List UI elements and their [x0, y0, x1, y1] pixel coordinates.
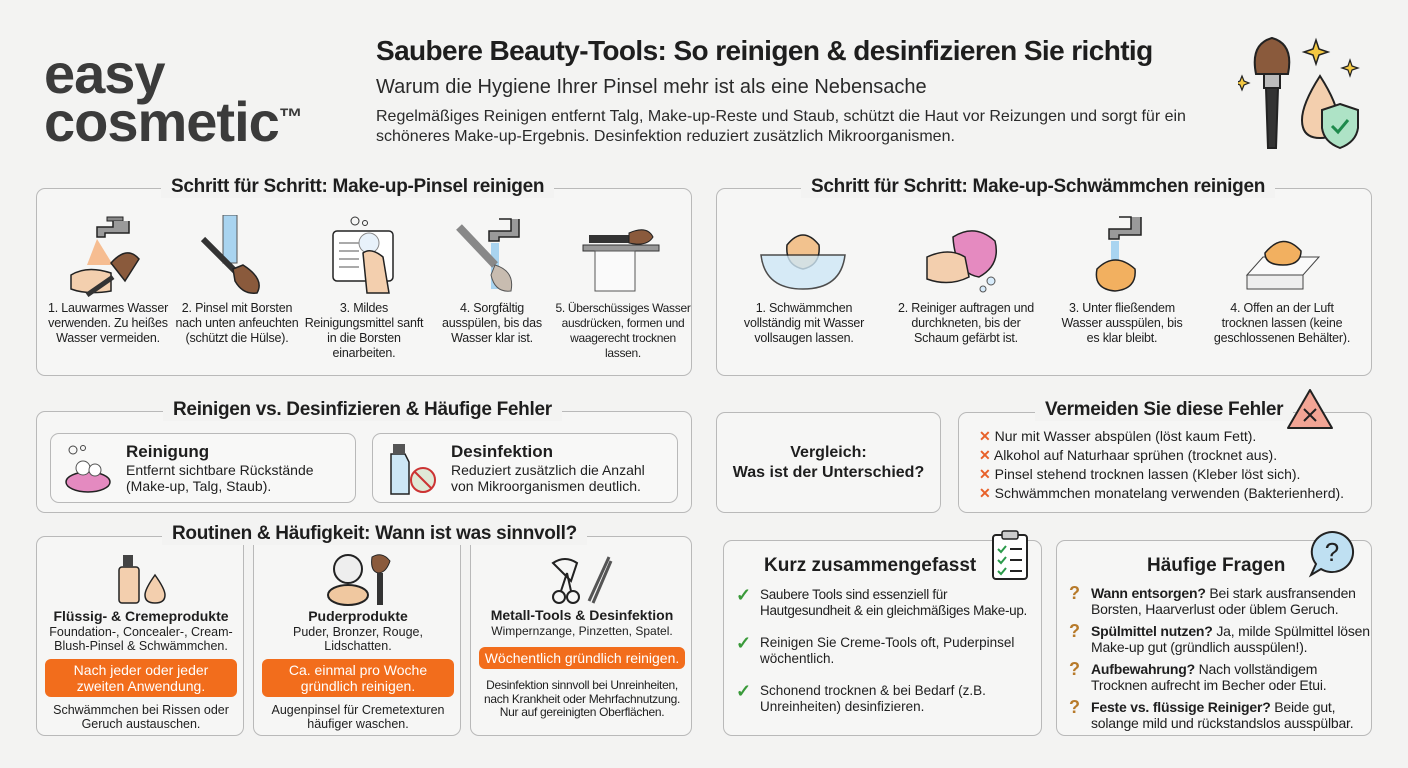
icon: soap — [65, 445, 111, 493]
icon: checklist — [992, 530, 1028, 580]
panel: sponge cleaning steps — [716, 188, 1372, 376]
card: metal tools: Metall-Tools & Desinfektion — [491, 607, 673, 623]
panel: FAQ — [1056, 540, 1372, 736]
step 5: 5. Überschüssiges Wasser ausdrücken, formen und waagerecht trocknen lassen. — [555, 301, 691, 360]
card: metal tools — [470, 536, 692, 736]
card: Reinigung — [50, 433, 356, 503]
list: FAQ: ? — [1069, 697, 1080, 717]
card: liquid products: Nach jeder oder jeder zweiten Anwendung. — [74, 662, 208, 694]
icon: hand squeezing sponge — [926, 230, 998, 292]
list: summary points: Saubere Tools sind essenziell für Hautgesundheit & ein gleichmäßiges Make-up. — [760, 587, 1027, 618]
list: FAQ: ? — [1069, 583, 1080, 603]
card: powder products: Ca. einmal pro Woche gründlich reinigen. — [289, 662, 427, 694]
icon: foundation and sponge — [118, 555, 166, 604]
text: Reinigung: Entfernt sichtbare Rückstände — [126, 462, 314, 478]
list: FAQ: ? — [1069, 621, 1080, 641]
list: summary points: ✓ — [736, 585, 751, 605]
icon: sponge on towel — [1246, 240, 1320, 290]
icon: sponge under tap — [1096, 216, 1142, 292]
list: summary points: Reinigen Sie Creme-Tools oft, Puderpinsel wöchentlich. — [760, 635, 1014, 666]
box: comparison question — [716, 412, 941, 513]
list: summary points — [736, 585, 1027, 714]
title: Saubere Beauty-Tools: So reinigen & desinfizieren Sie richtig — [376, 35, 1153, 66]
list: FAQ: ? — [1069, 659, 1080, 679]
icon: question bubble: ? — [1325, 537, 1339, 567]
text: Reinigung: (Make-up, Talg, Staub). — [126, 478, 271, 494]
card: liquid products — [36, 536, 244, 736]
text: Desinfektion: Reduziert zusätzlich die Anzahl — [451, 462, 645, 478]
step 1: 1. Lauwarmes Wasser verwenden. Zu heißes Wasser vermeiden. — [48, 301, 168, 345]
icon: tap and hands — [70, 216, 140, 297]
list: summary points: ✓ — [736, 681, 751, 701]
card: powder products: Puder, Bronzer, Rouge, Lidschatten. Augenpinsel für Cremetexturen häufiger waschen. — [271, 625, 444, 731]
icon: sponge in bowl — [760, 234, 846, 290]
list: FAQ: Aufbewahrung? Nach vollständigem Trocknen aufrecht im Becher oder Etui. — [1091, 661, 1326, 693]
logo: cosmetic™ — [44, 90, 302, 153]
text: Desinfektion: von Mikroorganismen deutlich. — [451, 478, 641, 494]
step s3: 3. Unter fließendem Wasser ausspülen, bis es klar bleibt. — [1061, 301, 1183, 345]
card: powder products: Puderprodukte — [308, 608, 408, 624]
list: mistakes: ✕ Nur mit Wasser abspülen (löst kaum Fett). — [979, 428, 1256, 444]
icon: compact and brush — [327, 554, 390, 606]
panel: routines — [36, 523, 692, 736]
intro text: Regelmäßiges Reinigen entfernt Talg, Make-up-Reste und Staub, schützt die Haut vor Reizungen und sorgt für ein schöneres Make-up-Ergebnis. Desinfektion reduziert zusätzlich Mikroorganismen. — [376, 108, 1186, 145]
icon: soap and hand — [332, 216, 394, 294]
box: comparison question: Was ist der Unterschied? — [733, 464, 924, 481]
icon: spray bottle — [390, 444, 436, 495]
heading: pinsel steps: Schritt für Schritt: Make-up-Pinsel reinigen — [171, 176, 544, 197]
heading: routines: Routinen & Häufigkeit: Wann ist was sinnvoll? — [172, 523, 577, 544]
icon: rinse brush — [456, 218, 520, 292]
heading: vs: Reinigen vs. Desinfizieren & Häufige Fehler — [173, 399, 552, 420]
list: summary points: ✓ — [736, 633, 751, 653]
icon: warning triangle — [1287, 389, 1333, 429]
card: powder products — [253, 536, 461, 736]
box: comparison question: Vergleich: — [790, 444, 867, 461]
panel: cleaning vs disinfection — [36, 411, 692, 513]
step s2: 2. Reiniger auftragen und durchkneten, bis der Schaum gefärbt ist. — [898, 301, 1034, 345]
step 3: 3. Mildes Reinigungsmittel sanft in die Borsten einarbeiten. — [305, 301, 423, 360]
logo — [44, 42, 302, 153]
list: mistakes — [979, 428, 1344, 501]
card: liquid products: Flüssig- & Cremeprodukte — [53, 608, 229, 624]
panel: summary — [723, 540, 1042, 736]
list: FAQ: Spülmittel nutzen? Ja, milde Spülmittel lösen Make-up gut (gründlich ausspülen!). — [1091, 623, 1370, 655]
list: mistakes: ✕ Alkohol auf Naturhaar sprühen (trocknet aus). — [979, 447, 1277, 463]
step 4: 4. Sorgfältig ausspülen, bis das Wasser klar ist. — [442, 301, 542, 345]
panel: mistakes — [958, 412, 1372, 513]
icon: question bubble — [1308, 531, 1354, 578]
list: FAQ — [1069, 583, 1370, 731]
card: metal tools: Wimpernzange, Pinzetten, Spatel. Desinfektion sinnvoll bei Unreinheiten, nach Krankheit oder Mehrfachnutzung. Nur auf gereinigten Oberflächen. — [484, 624, 680, 719]
heading: FAQ: Häufige Fragen — [1147, 555, 1285, 576]
logo: easy — [44, 42, 165, 105]
text: Desinfektion: Desinfektion — [451, 442, 553, 461]
card: Desinfektion — [372, 433, 678, 503]
list: mistakes: ✕ Schwämmchen monatelang verwenden (Bakterienherd). — [979, 485, 1344, 501]
step 2: 2. Pinsel mit Borsten nach unten anfeuchten (schützt die Hülse). — [176, 301, 298, 345]
icon: brush, sponge, shield — [1238, 37, 1360, 150]
step s1: 1. Schwämmchen vollständig mit Wasser vollsaugen lassen. — [744, 301, 864, 345]
icon: curler and tweezers — [552, 556, 612, 604]
icon: brush under water — [200, 215, 260, 294]
heading: summary: Kurz zusammengefasst — [764, 555, 976, 576]
heading: mistakes: Vermeiden Sie diese Fehler — [1045, 399, 1283, 420]
card: metal tools: Wöchentlich gründlich reinigen. — [485, 650, 679, 666]
text: Reinigung — [126, 442, 314, 494]
icon: brush drying on towel — [582, 229, 660, 292]
list: summary points: Schonend trocknen & bei Bedarf (z.B. Unreinheiten) desinfizieren. — [760, 683, 986, 714]
text: Reinigung: Reinigung — [126, 442, 209, 461]
heading: sponge steps: Schritt für Schritt: Make-up-Schwämmchen reinigen — [811, 176, 1265, 197]
text: Desinfektion — [451, 442, 645, 494]
step s4: 4. Offen an der Luft trocknen lassen (keine geschlossenen Behälter). — [1214, 301, 1350, 345]
card: liquid products: Foundation-, Concealer-, Cream-Blush-Pinsel & Schwämmchen. Schwämmchen bei Rissen oder Geruch austauschen. — [49, 625, 233, 731]
list: FAQ: Feste vs. flüssige Reiniger? Beide gut, solange mild und rückstandslos ausspülbar. — [1091, 699, 1353, 731]
list: FAQ: Wann entsorgen? Bei stark ausfransenden Borsten, Haarverlust oder üblem Geruch. — [1091, 585, 1356, 617]
subtitle: Warum die Hygiene Ihrer Pinsel mehr ist als eine Nebensache — [376, 76, 927, 98]
list: mistakes: ✕ Pinsel stehend trocknen lassen (Kleber löst sich). — [979, 466, 1300, 482]
panel: brush cleaning steps — [36, 188, 692, 376]
